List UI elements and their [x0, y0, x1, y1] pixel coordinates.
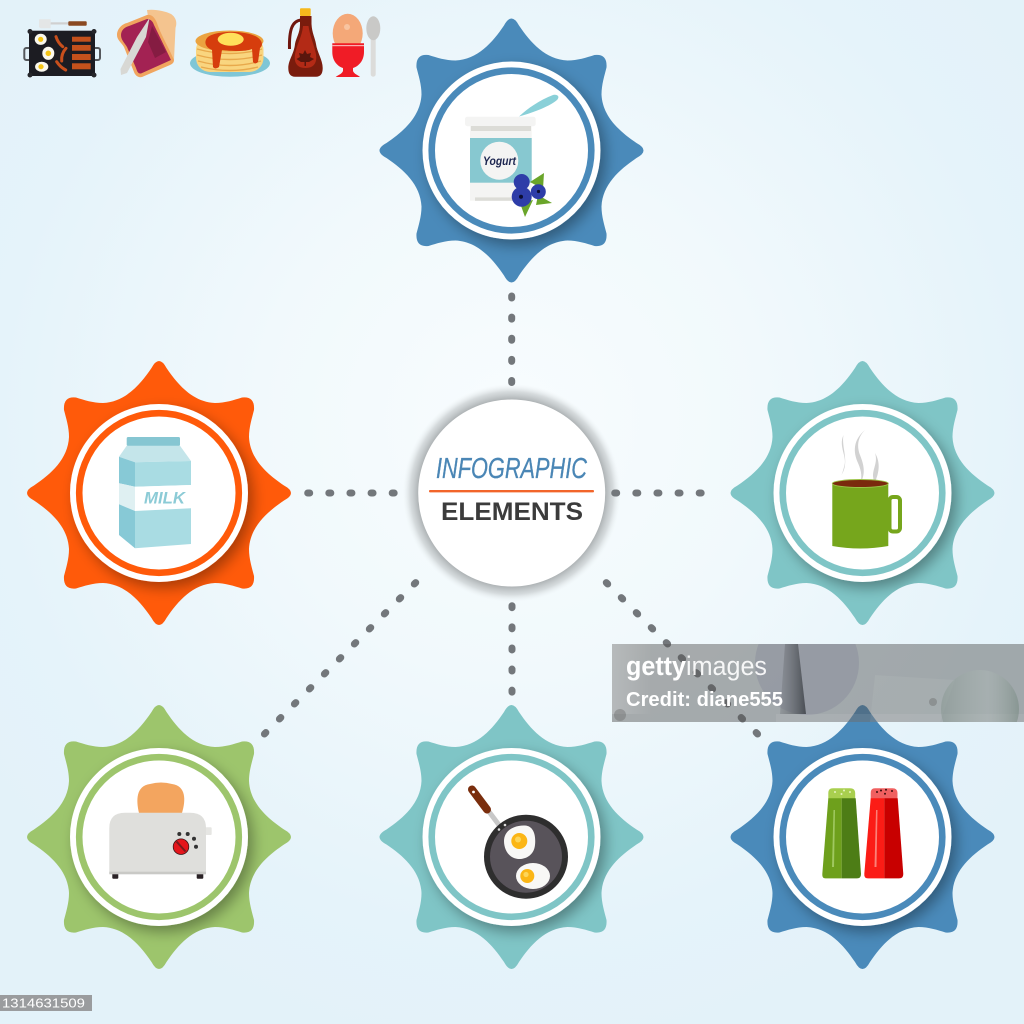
panel: salt and pepper badge	[730, 705, 994, 969]
panel: coffee badge	[730, 361, 994, 625]
watermark text: credit: Credit: diane555	[626, 689, 783, 711]
icon: syrup bottle	[288, 8, 323, 77]
icon: red shaker	[864, 788, 903, 878]
watermark: getty images	[612, 644, 1024, 722]
icon: toaster	[109, 782, 212, 879]
icon: griddle	[24, 19, 100, 78]
panel: frying pan badge	[380, 705, 644, 969]
icon row: breakfast foods	[24, 8, 380, 77]
panel: central hub	[403, 384, 621, 602]
icon: milk carton	[119, 437, 191, 548]
divider line	[429, 490, 594, 492]
panel: toaster badge	[27, 705, 291, 969]
icon: coffee mug	[832, 430, 900, 548]
icon: green shaker	[822, 788, 861, 878]
heading: infographic: INFOGRAPHIC	[436, 453, 588, 485]
image id tag: 1314631509	[2, 996, 85, 1010]
icon: milk carton: MILK	[144, 490, 186, 508]
dotted connectors	[264, 296, 758, 734]
icon: spoon	[366, 16, 380, 77]
heading: elements: ELEMENTS	[441, 498, 583, 526]
panel: yogurt badge	[380, 18, 644, 282]
icon: toast with jam	[117, 10, 176, 77]
icon: frying pan with eggs	[472, 790, 568, 899]
panel: milk badge	[27, 361, 291, 625]
icon: yogurt cup: Yogurt	[483, 156, 517, 168]
icon: egg in cup	[332, 14, 364, 77]
icon: pancakes	[190, 30, 270, 77]
watermark text: gettyimages: gettyimages	[626, 651, 767, 681]
icon: yogurt cup	[465, 95, 558, 217]
image id tag	[0, 995, 92, 1011]
